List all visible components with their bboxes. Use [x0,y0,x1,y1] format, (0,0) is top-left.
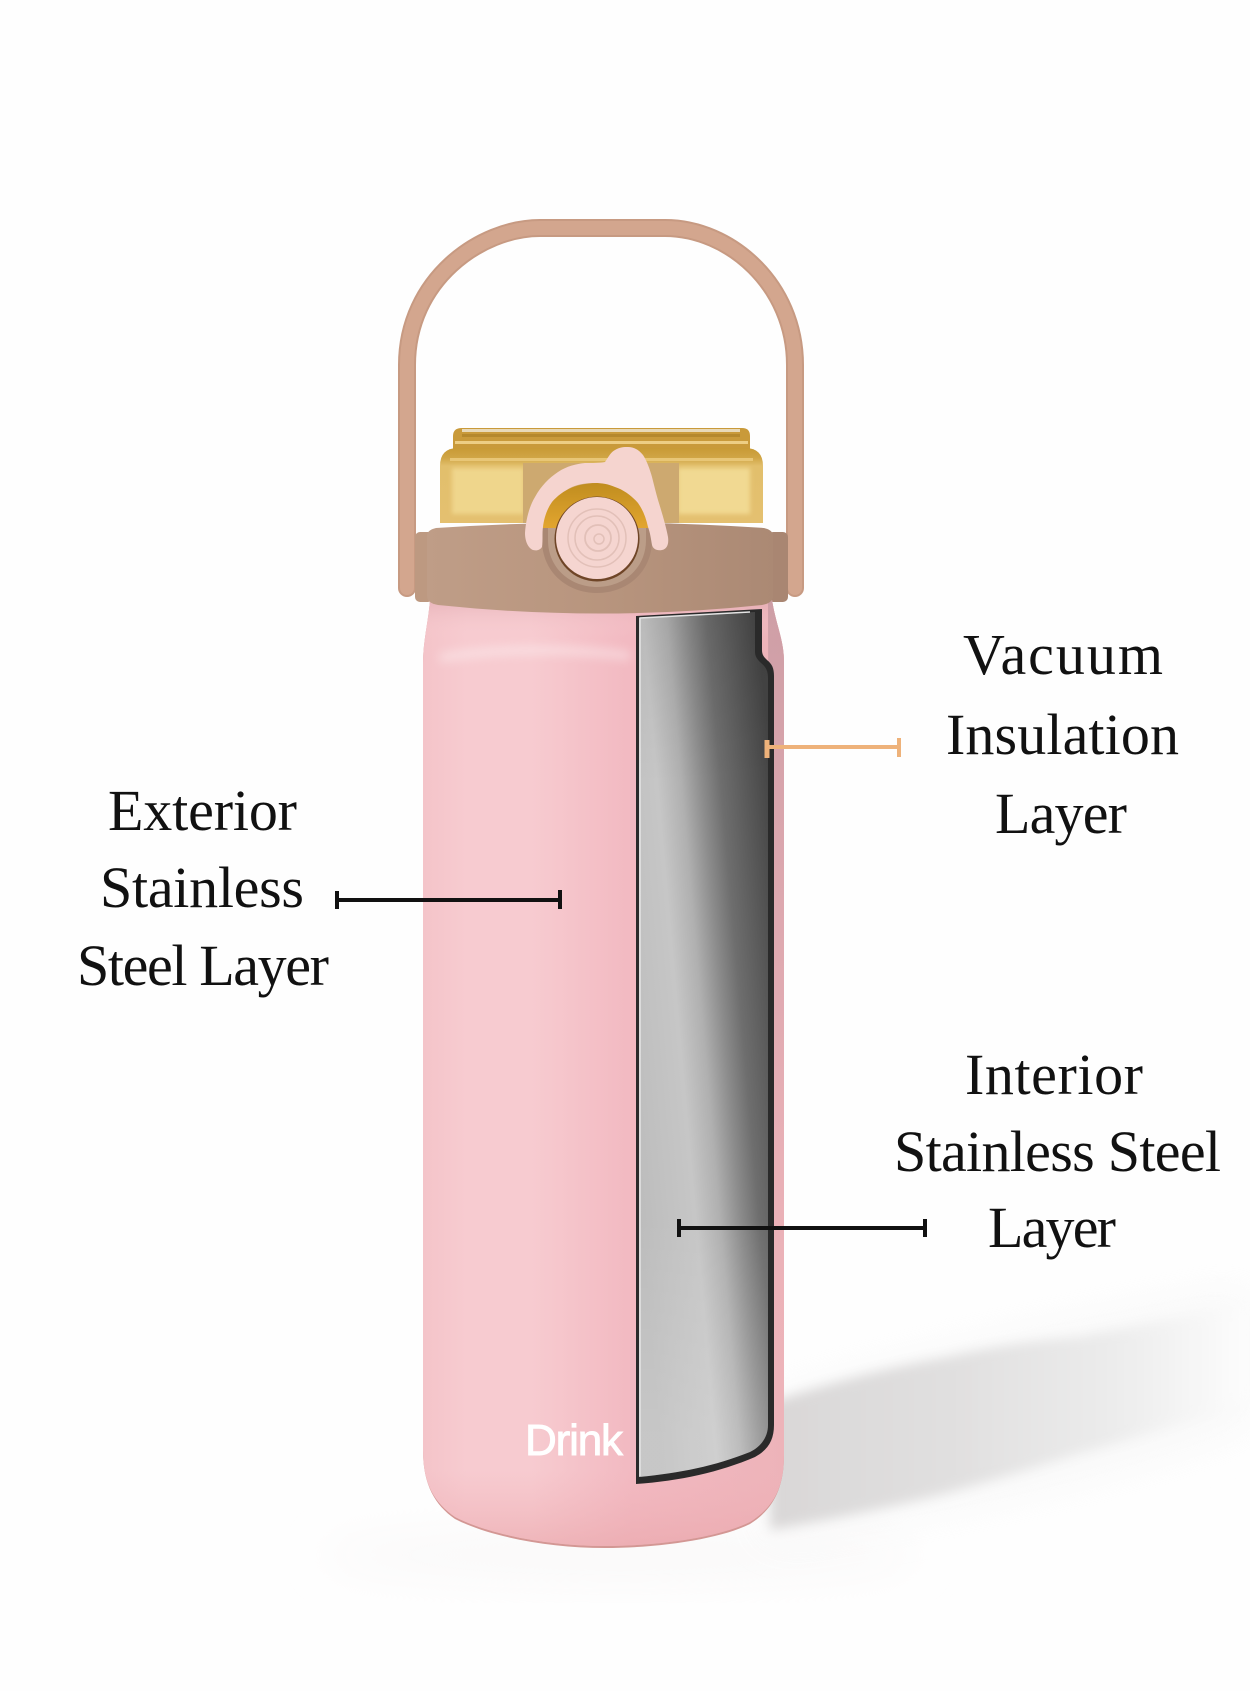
side tabs [415,532,433,602]
handle [407,228,795,588]
bottle body [423,600,784,1548]
collar [427,522,773,614]
cutaway window [636,609,774,1484]
label: interior stainless steel layer: Layer [988,1195,1116,1260]
bottle [407,228,795,1548]
label: vacuum insulation layer: Layer [995,781,1127,846]
leader line: exterior [337,890,560,909]
leader line: interior [679,1219,925,1237]
leader line: vacuum [767,738,899,758]
label: interior stainless steel layer: Stainless Steel [894,1119,1221,1184]
label: vacuum insulation layer [946,622,1179,846]
label: vacuum insulation layer: Vacuum [963,622,1163,687]
brand text: Drink [525,1416,624,1465]
callout: interior layer [679,1042,1221,1260]
callout: vacuum insulation [767,622,1179,846]
label: exterior stainless steel layer: Steel Layer [77,933,329,998]
label: exterior stainless steel layer [77,778,329,998]
label: interior stainless steel layer: Interior [965,1042,1143,1107]
floor glow [320,1533,920,1577]
cast shadow [770,1290,1250,1535]
callout: exterior layer [77,778,560,998]
amber lid [440,428,763,523]
label: exterior stainless steel layer: Exterior [108,778,297,843]
lid button [525,447,668,593]
label: interior stainless steel layer [894,1042,1221,1260]
label: vacuum insulation layer: Insulation [946,702,1179,767]
label: exterior stainless steel layer: Stainless [100,855,304,920]
